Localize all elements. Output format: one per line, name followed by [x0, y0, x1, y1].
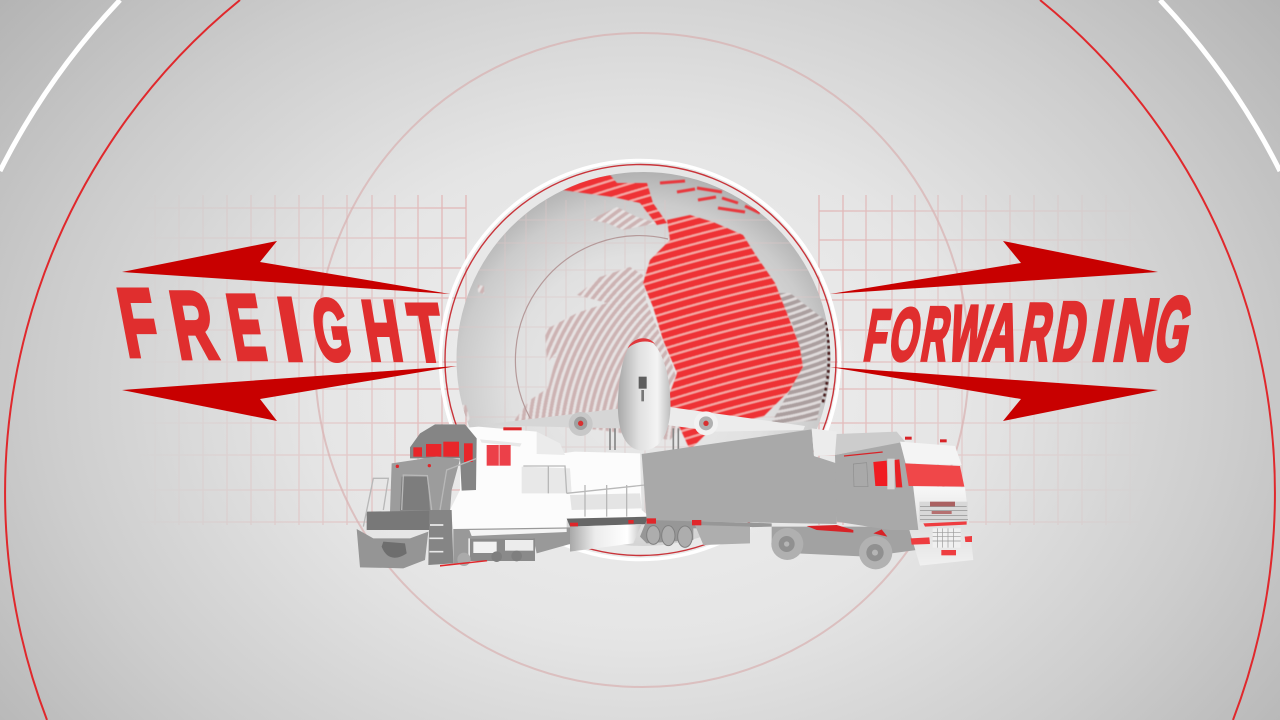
cab spoiler: [835, 432, 905, 455]
red accents: [440, 427, 655, 567]
left wing: [481, 408, 621, 428]
cab roof: [900, 442, 962, 465]
landing gear: [610, 428, 678, 450]
cab door: [853, 463, 868, 487]
right lower arrow: [830, 367, 1158, 421]
right engine: [694, 411, 718, 435]
trailer skirt: [640, 520, 772, 543]
right upper arrow: [830, 241, 1158, 294]
left lower arrow: [122, 366, 457, 421]
land: left continent: [513, 267, 690, 440]
heading: FORWARDING: N: [1108, 281, 1165, 379]
inner grid: [456, 200, 830, 520]
cab front: [909, 486, 973, 566]
locomotive: [357, 424, 655, 568]
side window: [480, 439, 522, 466]
heading: FORWARDING: A: [979, 288, 1027, 377]
heading: FREIGHT: G: [306, 282, 357, 379]
headlights: [370, 464, 431, 518]
upper panel: [537, 432, 565, 455]
heading: FORWARDING: I: [1087, 283, 1120, 378]
heading: FORWARDING: [859, 280, 1199, 380]
connector: [812, 428, 837, 456]
heading: FORWARDING: D: [1048, 286, 1094, 379]
land: main red continent: [643, 215, 803, 450]
cab: [410, 424, 477, 491]
nose: [390, 457, 460, 512]
heading: FORWARDING: G: [1148, 280, 1199, 380]
land: small islands: [462, 285, 484, 422]
cab side: [835, 442, 918, 530]
land: upper right dashes: [660, 181, 760, 213]
trailer markers: [647, 518, 701, 525]
cab windows: [413, 442, 473, 462]
heading: FORWARDING: O: [884, 293, 928, 376]
land masses: [458, 175, 829, 450]
airplane: [481, 338, 805, 451]
nose stripe: [628, 338, 655, 348]
main body: [450, 427, 652, 529]
truck: [640, 428, 973, 569]
heading: FREIGHT: R: [163, 273, 223, 378]
heading: FORWARDING: F: [859, 296, 895, 376]
heading: FREIGHT: F: [111, 270, 167, 378]
bumper lights: [911, 521, 972, 555]
fuel tank: [570, 524, 642, 552]
bogie: [457, 538, 535, 566]
fuselage: [618, 338, 671, 451]
land: upper centre: [590, 207, 657, 230]
heading: FORWARDING: R: [1015, 286, 1060, 378]
skirt: [453, 527, 570, 563]
hood shading: [522, 467, 572, 493]
heading: FREIGHT: I: [271, 280, 309, 379]
globe: [456, 172, 830, 546]
steps: [428, 510, 453, 565]
front deck: [367, 511, 433, 530]
heading: FORWARDING: W: [943, 290, 997, 377]
sphere: [456, 172, 830, 546]
right wing: [667, 407, 805, 432]
dark edge shading: [822, 322, 829, 405]
chassis: [772, 527, 917, 557]
rear tractor wheel: [771, 528, 803, 560]
outer white ring: [0, 0, 1280, 171]
left upper arrow: [122, 241, 450, 294]
roof markers: [905, 437, 947, 442]
inner globe arc: [515, 236, 668, 418]
trailer: [642, 429, 837, 524]
snow plow: [357, 529, 428, 568]
heading: FORWARDING: R: [916, 291, 957, 376]
heading: FREIGHT: E: [220, 276, 272, 379]
windshield: [905, 463, 964, 487]
trailer wheels: [647, 526, 692, 547]
middle pale ring: [315, 33, 969, 687]
land: right grey continent: [770, 293, 827, 425]
perspective grid: [135, 195, 1150, 525]
side sill: [567, 517, 650, 527]
left engine: [569, 412, 593, 436]
front tractor wheel: [859, 536, 892, 569]
globe frame rings: [440, 160, 840, 560]
grille: [919, 502, 968, 548]
land: upper red: [563, 175, 667, 225]
heading: FREIGHT: T: [403, 286, 450, 379]
handrails: [363, 458, 647, 527]
heading: FREIGHT: H: [356, 283, 408, 378]
side windows: [873, 459, 902, 489]
cockpit: [639, 377, 647, 401]
heading: FREIGHT: [111, 270, 450, 379]
